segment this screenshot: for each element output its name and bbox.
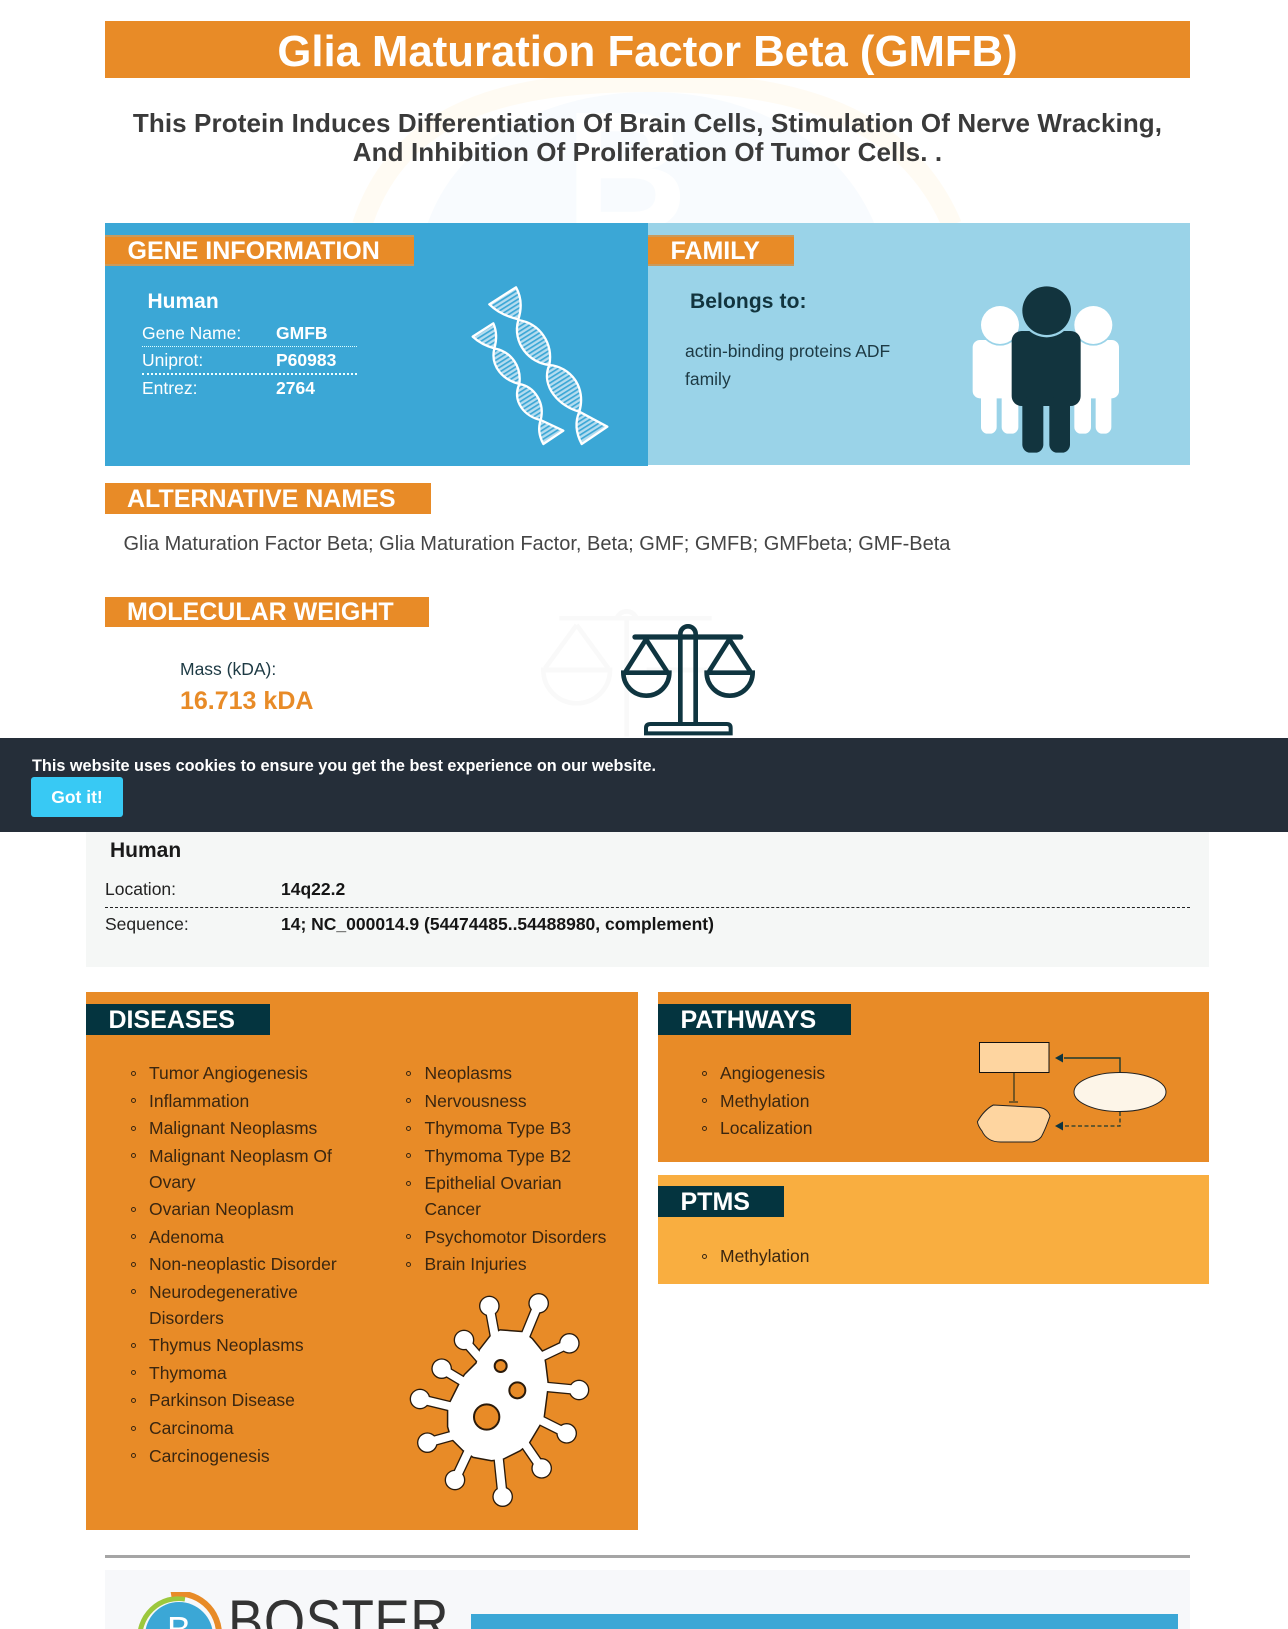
cookie banner: [0, 738, 1288, 832]
list: diseases column 2: Nervousness: [424, 1091, 527, 1111]
heading: family: [648, 235, 794, 266]
list: diseases column 2: [406, 1063, 606, 1274]
button: got it: [31, 777, 123, 817]
list: diseases column 1: Thymus Neoplasms: [149, 1335, 304, 1355]
panel: pathways: [658, 992, 1209, 1162]
panel: ptms: [658, 1175, 1209, 1284]
list: diseases column 2: Thymoma Type B3: [424, 1118, 571, 1138]
list: diseases column 1: Disorders: [149, 1308, 224, 1328]
icon: balance scale: [621, 624, 755, 736]
list: diseases column 1: Carcinoma: [149, 1418, 234, 1438]
heading: diseases: [86, 1004, 270, 1035]
alternative names text: Glia Maturation Factor Beta; Glia Maturation Factor, Beta; GMF; GMFB; GMFbeta; GMF-Beta: [124, 533, 950, 555]
list: diseases column 1: Parkinson Disease: [149, 1390, 295, 1410]
list: diseases column 1: Malignant Neoplasms: [149, 1118, 317, 1138]
list: diseases column 2: Brain Injuries: [424, 1254, 527, 1274]
watermark: logo behind subtitle: [352, 77, 961, 225]
mass value: 16.713 kDA: [180, 687, 313, 715]
species label: Human: [110, 838, 181, 862]
list: diseases column 1: Adenoma: [149, 1227, 224, 1247]
panel: family: [648, 223, 1190, 465]
location row: 14q22.2: [281, 879, 345, 899]
list: diseases column 2: Cancer: [424, 1199, 481, 1219]
entrez row: 2764: [276, 378, 315, 398]
list: diseases column 1: Inflammation: [149, 1091, 249, 1111]
mass label: Mass (kDA):: [180, 659, 276, 679]
gene name row: Gene Name:: [142, 323, 241, 343]
sequence row: Sequence:: [105, 914, 189, 934]
list: diseases column 1: Thymoma: [149, 1363, 227, 1383]
subtitle: This Protein Induces Differentiation Of Brain Cells, Stimulation Of Nerve Wracking,: [133, 108, 1162, 138]
list: diseases column 2: Neoplasms: [424, 1063, 512, 1083]
heading: family: FAMILY: [670, 237, 760, 265]
footer bar: [471, 1614, 1178, 1629]
list: diseases column 1: Neurodegenerative: [149, 1282, 298, 1302]
heading: molecular weight: MOLECULAR WEIGHT: [127, 598, 394, 626]
list: diseases column 2: Epithelial Ovarian: [424, 1173, 562, 1193]
list: diseases column 2: Thymoma Type B2: [424, 1146, 571, 1166]
family text: [685, 341, 890, 389]
cookie message: This website uses cookies to ensure you get the best experience on our website.: [32, 757, 656, 775]
subtitle: [133, 108, 1162, 166]
gene name row: GMFB: [276, 323, 328, 343]
panel: gene location: [86, 820, 1209, 967]
icon: pathway diagram: [976, 1042, 1166, 1142]
icon: virus: [410, 1293, 590, 1507]
location row: Location:: [105, 879, 176, 899]
heading: gene information: GENE INFORMATION: [128, 237, 380, 265]
list: diseases column 1: [131, 1063, 337, 1466]
gene name row: [142, 320, 357, 347]
title banner: Glia Maturation Factor Beta (GMFB): [277, 27, 1018, 76]
entrez row: [142, 378, 315, 398]
heading: ptms: [658, 1186, 784, 1217]
list: pathways: Methylation: [720, 1091, 810, 1111]
subtitle: And Inhibition Of Proliferation Of Tumor Cells. .: [353, 136, 942, 166]
panel: gene information: [105, 223, 648, 466]
family text: family: [685, 369, 731, 389]
list: diseases column 1: Non-neoplastic Disorder: [149, 1254, 337, 1274]
family text: actin-binding proteins ADF: [685, 341, 890, 361]
panel: footer: [105, 1570, 1190, 1629]
heading: pathways: PATHWAYS: [680, 1006, 816, 1034]
list: pathways: Localization: [720, 1118, 812, 1138]
uniprot row: [142, 347, 357, 375]
sequence row: 14; NC_000014.9 (54474485..54488980, complement): [281, 914, 714, 934]
entrez row: Entrez:: [142, 378, 197, 398]
footer divider: [105, 1555, 1190, 1558]
heading: ptms: PTMS: [680, 1188, 750, 1216]
list: pathways: [702, 1063, 825, 1138]
belongs to label: Belongs to:: [690, 290, 807, 313]
heading: diseases: DISEASES: [108, 1006, 235, 1034]
logo mark: [138, 1592, 222, 1629]
list: diseases column 1: Ovarian Neoplasm: [149, 1199, 294, 1219]
title banner: [105, 21, 1190, 78]
list: diseases column 1: Ovary: [149, 1172, 196, 1192]
list: diseases column 1: Malignant Neoplasm Of: [149, 1146, 332, 1166]
species label: Human: [148, 290, 219, 313]
list: diseases column 1: Carcinogenesis: [149, 1446, 270, 1466]
list: ptms: Methylation: [720, 1246, 810, 1266]
button: got it: Got it!: [51, 787, 103, 807]
heading: alternative names: ALTERNATIVE NAMES: [127, 485, 396, 513]
icon: dna helix: [472, 286, 608, 446]
location row: [105, 876, 1190, 908]
icon: people group: [972, 286, 1119, 453]
list: pathways: Angiogenesis: [720, 1063, 825, 1083]
list: diseases column 1: Tumor Angiogenesis: [149, 1063, 308, 1083]
uniprot row: Uniprot:: [142, 350, 203, 370]
uniprot row: P60983: [276, 350, 336, 370]
heading: pathways: [658, 1004, 851, 1035]
list: diseases column 2: Psychomotor Disorders: [424, 1227, 606, 1247]
panel: diseases: [86, 992, 638, 1530]
